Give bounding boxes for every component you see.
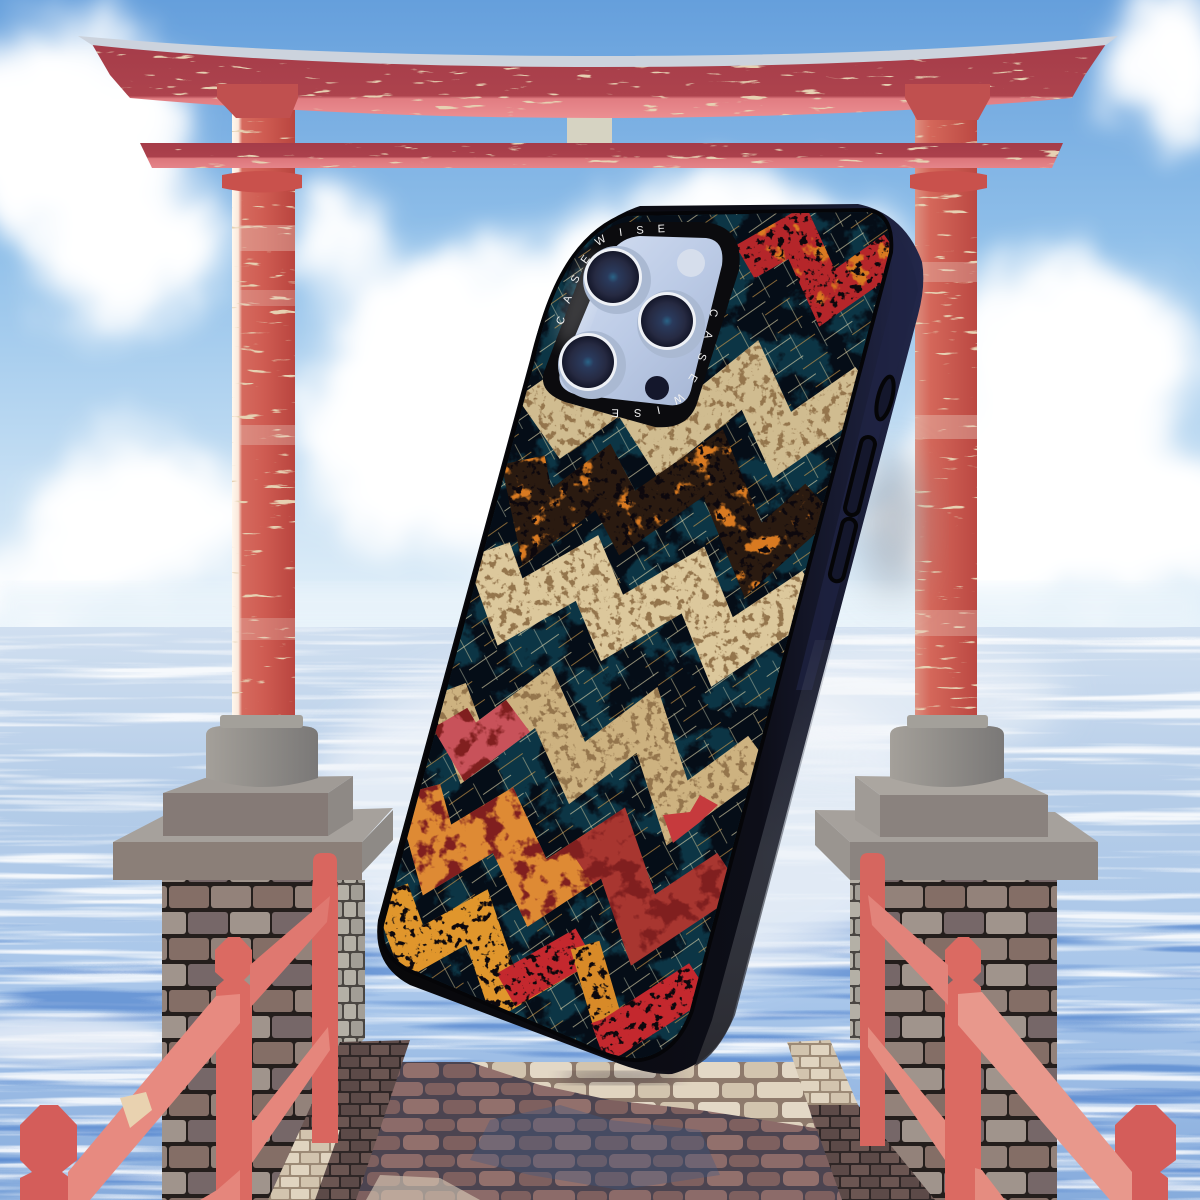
brick column side right bbox=[850, 880, 872, 1040]
torii: left pillar cap bbox=[217, 84, 298, 118]
phone shadow on walkway bbox=[560, 1072, 680, 1084]
case artwork: chevron pattern bbox=[370, 200, 900, 1070]
chevron: dark ember band bbox=[523, 460, 820, 560]
sunlit stones bbox=[470, 1062, 815, 1128]
puddles bbox=[470, 1105, 720, 1190]
torii: left pillar bbox=[222, 100, 302, 718]
brick column side left bbox=[338, 880, 365, 1066]
right curb upper sunlit bbox=[787, 1040, 858, 1105]
side button: power bbox=[828, 517, 858, 583]
artwork hatch lines bbox=[370, 200, 900, 1070]
torii: central strut bbox=[567, 106, 612, 144]
slab upper left bbox=[163, 776, 353, 836]
chevron: pink segment bbox=[450, 716, 518, 752]
chevron: tan middle bbox=[488, 550, 815, 652]
chevron: red flecks on tan bbox=[663, 795, 718, 843]
rail upper back left bbox=[250, 896, 330, 1008]
right stone base bbox=[815, 715, 1098, 1200]
worn patch on rail bbox=[120, 1092, 152, 1128]
rail lower back left bbox=[252, 1027, 330, 1163]
brick column left bbox=[162, 880, 338, 1200]
horizon haze bbox=[0, 585, 1200, 630]
cloud: right bank bbox=[890, 250, 1200, 610]
right curb lower shaded bbox=[808, 1105, 935, 1200]
rail lower back right bbox=[868, 1027, 945, 1160]
brand text lower: CASEWISE bbox=[612, 310, 718, 417]
slab lower left bbox=[113, 808, 393, 880]
cloud: top right bbox=[1110, 0, 1200, 140]
walkway surface in shade bbox=[355, 1062, 842, 1200]
upper navy body highlight bbox=[796, 232, 918, 690]
post front right bbox=[1115, 1105, 1176, 1200]
brick column right bbox=[872, 880, 1057, 1200]
sun patches bbox=[366, 1175, 480, 1200]
camera rim bbox=[543, 222, 740, 427]
cloud: top left bank bbox=[0, 20, 390, 320]
slab upper right bbox=[855, 776, 1048, 837]
rail upper front right bbox=[958, 992, 1132, 1200]
lens bottom bbox=[558, 331, 626, 399]
clouds bbox=[0, 0, 1200, 620]
torii: right pillar bbox=[910, 100, 987, 718]
camera plate bbox=[559, 236, 722, 405]
phone side body bbox=[377, 204, 923, 1074]
left curb bbox=[268, 1040, 410, 1200]
translucent lower edge bbox=[695, 640, 834, 1066]
stone cylinder left bbox=[206, 726, 318, 787]
glare on rim bbox=[548, 248, 612, 352]
lens top bbox=[583, 246, 651, 314]
post mid right bbox=[945, 937, 981, 1200]
brand text upper: CASEWISE bbox=[556, 224, 665, 324]
cloud: central bank bbox=[300, 180, 900, 560]
torii: right pillar cap bbox=[905, 84, 990, 120]
sea bbox=[0, 627, 1200, 1200]
chevron: orange and crimson bbox=[418, 790, 730, 930]
phone with case bbox=[377, 204, 924, 1074]
side button: volume bbox=[844, 435, 876, 517]
stone walkway bbox=[268, 1040, 935, 1200]
torii: lower crossbeam bbox=[140, 143, 1063, 168]
side button: action bbox=[873, 375, 897, 421]
stone ring left bbox=[220, 715, 303, 728]
stone ring right bbox=[907, 715, 988, 728]
torii gate bbox=[78, 36, 1118, 718]
left curb sunlit foot bbox=[268, 1130, 340, 1200]
post back right bbox=[860, 853, 885, 1146]
right red railing bbox=[860, 853, 1176, 1200]
case rim bbox=[384, 212, 889, 1058]
slab lower right bbox=[815, 810, 1098, 880]
sensor bbox=[645, 376, 669, 400]
camera island bbox=[542, 222, 740, 428]
chevron: yellow and red bbox=[390, 890, 700, 1042]
chevron: pink and tan bbox=[447, 690, 760, 813]
stone cylinder right bbox=[890, 726, 1004, 787]
rail upper back right bbox=[868, 895, 948, 1005]
rail lower front right bbox=[975, 1168, 1005, 1200]
sky background bbox=[0, 0, 1200, 630]
rail lower front left bbox=[200, 1170, 240, 1200]
left stone base bbox=[113, 715, 393, 1200]
post mid left bbox=[215, 937, 252, 1200]
chevron: tan under camera bbox=[535, 375, 868, 445]
post front left bbox=[20, 1105, 77, 1200]
flash bbox=[677, 249, 705, 277]
rail upper front left bbox=[68, 994, 240, 1200]
torii: top beam bbox=[78, 36, 1118, 118]
artwork base bbox=[370, 200, 900, 1070]
chevron: red top bbox=[745, 232, 895, 298]
left red railing bbox=[20, 853, 338, 1200]
cloud: lower left bbox=[0, 440, 250, 620]
post back left bbox=[312, 853, 338, 1143]
lens right bbox=[637, 290, 705, 358]
smoky reflection beside phone bbox=[865, 455, 921, 595]
